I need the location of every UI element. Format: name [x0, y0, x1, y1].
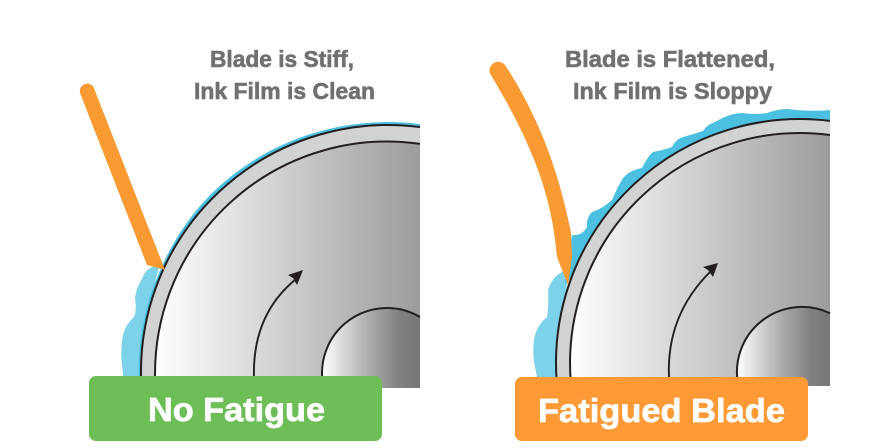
- panel: no fatigue: [80, 46, 420, 441]
- drum: [141, 125, 420, 388]
- ink film: clean: [121, 122, 420, 384]
- heading: blade is flattened: Blade is Flattened,: [565, 46, 775, 72]
- badge: no fatigue: [89, 376, 382, 441]
- badge: fatigued blade: Fatigued Blade: [538, 392, 785, 429]
- badge: no fatigue: No Fatigue: [148, 391, 325, 428]
- heading: blade is stiff: Blade is Stiff,: [210, 46, 354, 72]
- badge: fatigued blade: [515, 377, 808, 441]
- heading: blade is flattened: Ink Film is Sloppy: [573, 78, 772, 104]
- arrow: rotation: [254, 270, 303, 378]
- ink film: sloppy: [533, 109, 830, 384]
- blade: stiff: [80, 84, 165, 270]
- heading: blade is stiff: [194, 46, 375, 104]
- panel: fatigued blade: [490, 46, 830, 441]
- heading: blade is stiff: Ink Film is Clean: [194, 78, 375, 104]
- drum: [556, 119, 830, 386]
- heading: blade is flattened: [565, 46, 775, 104]
- blade: flattened: [490, 62, 572, 285]
- arrow: rotation: [669, 263, 718, 378]
